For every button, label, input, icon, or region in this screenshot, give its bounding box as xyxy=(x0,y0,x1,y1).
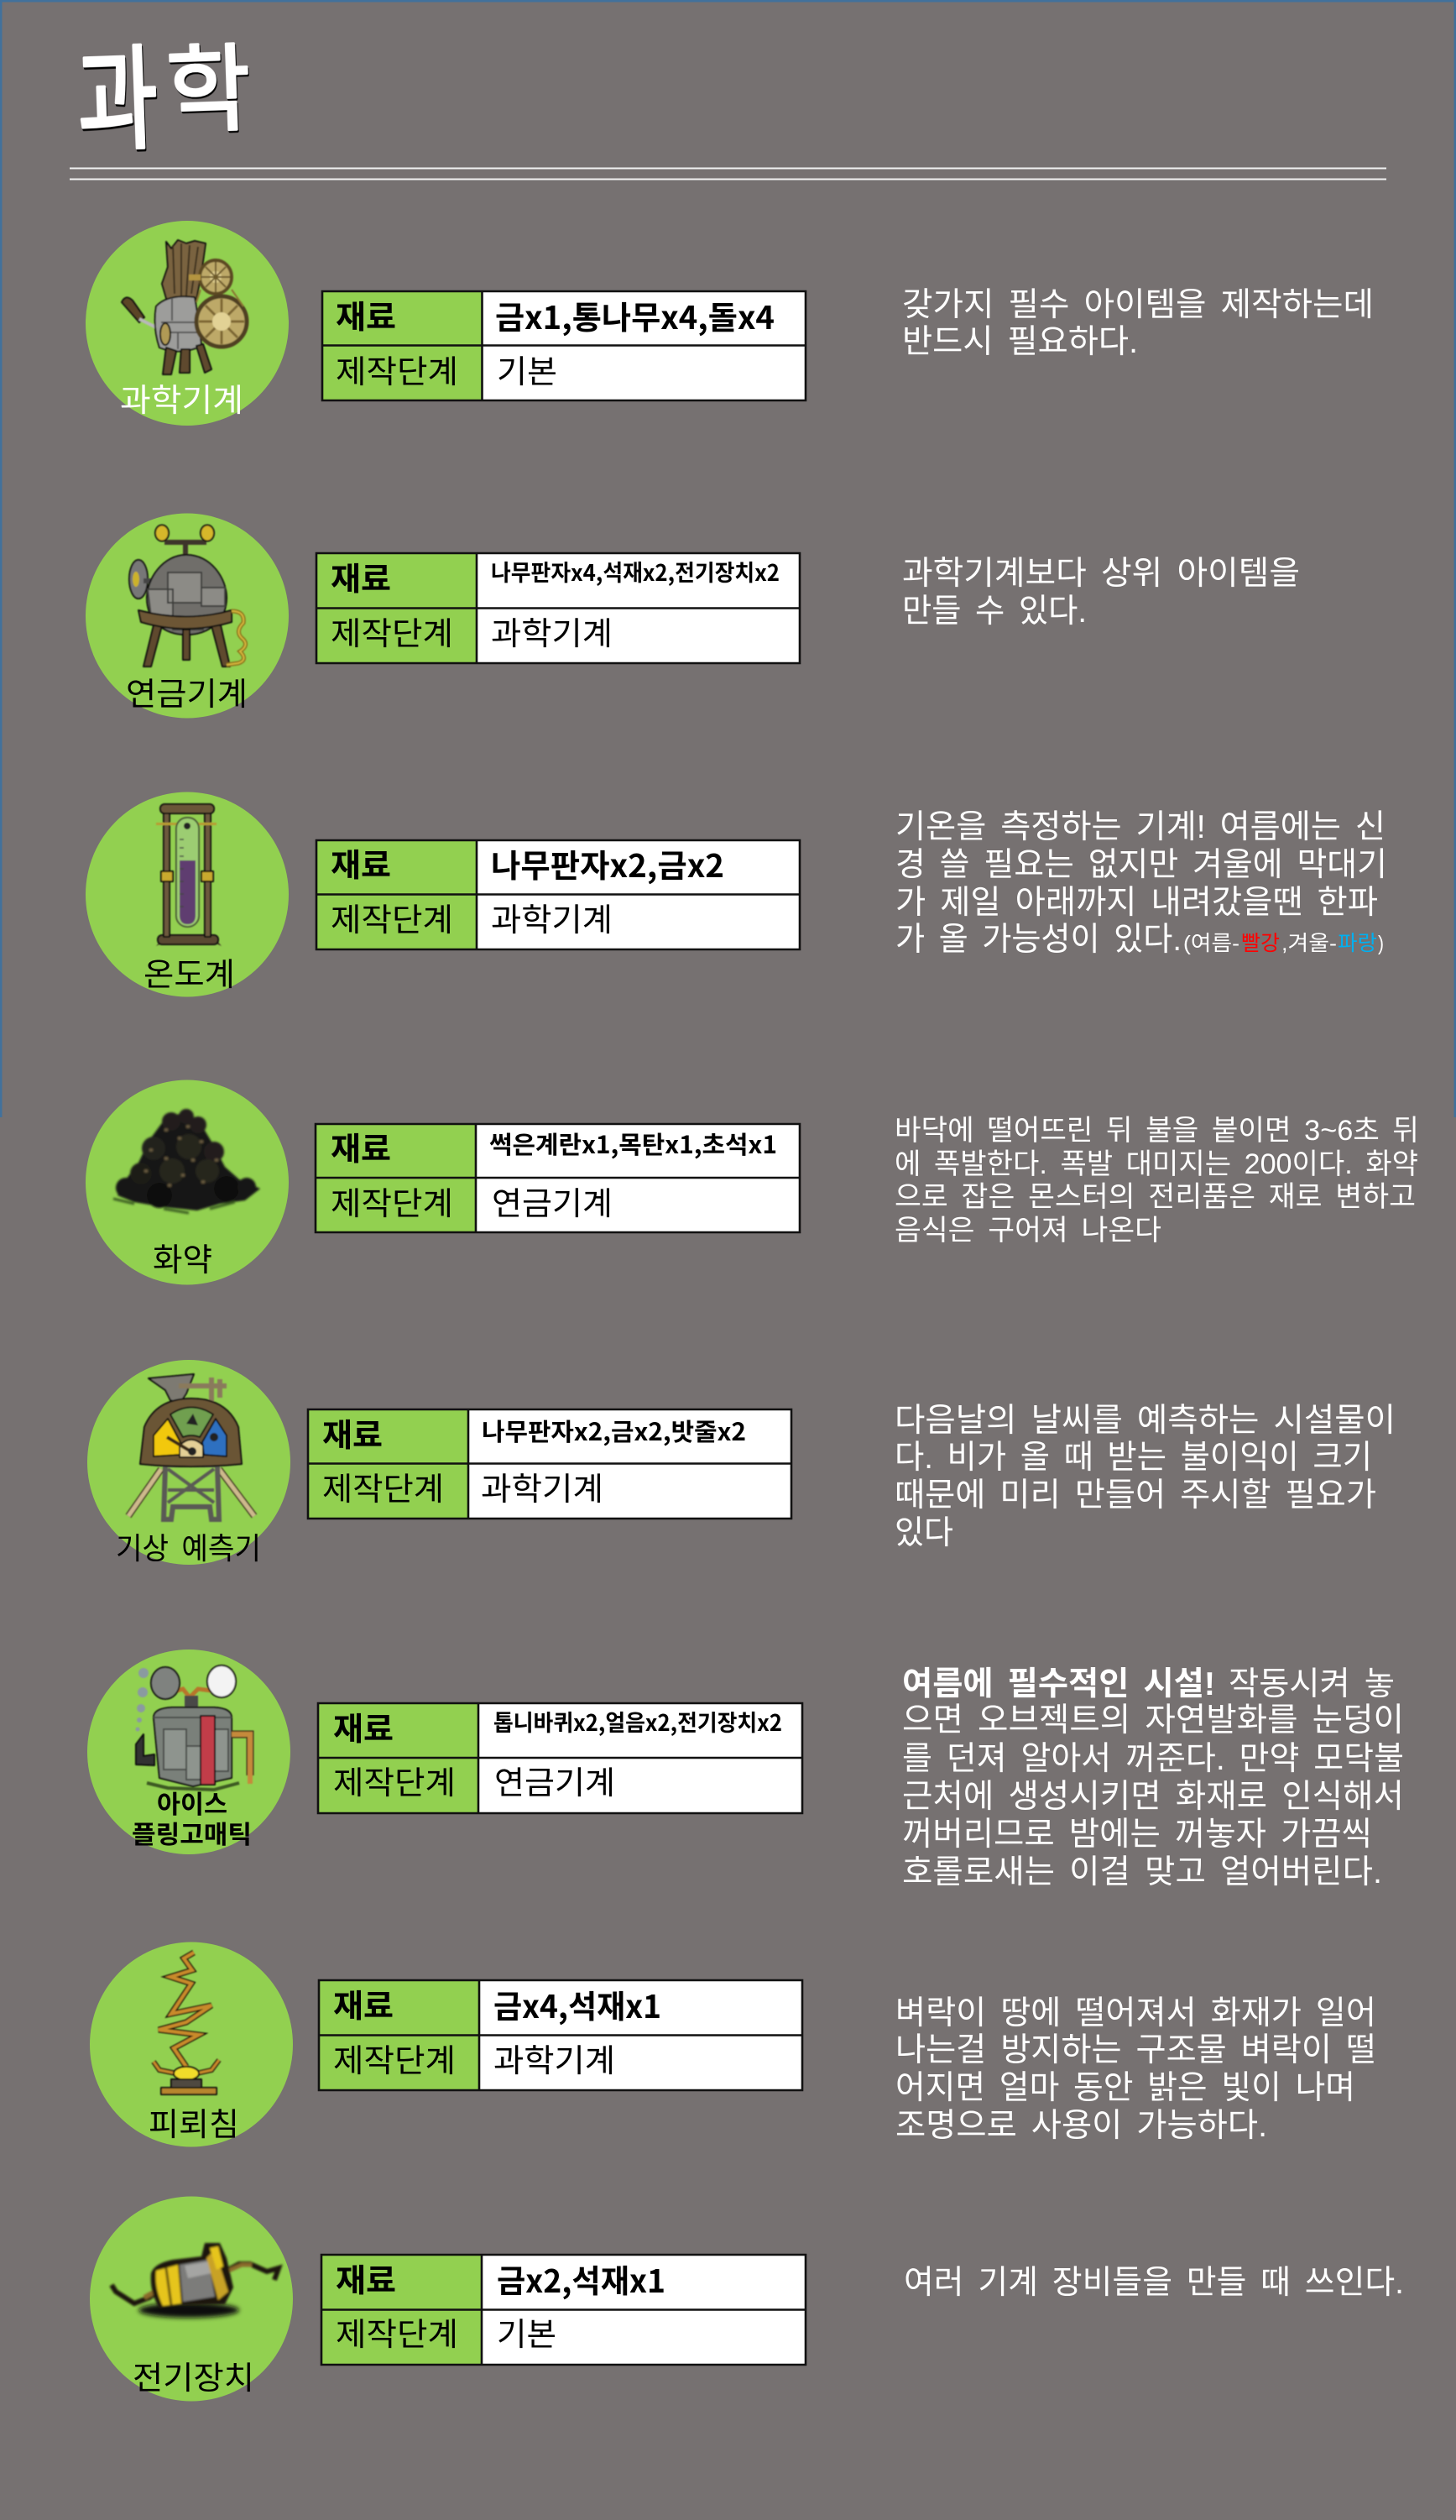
table: 전기장치 recipe: 재료 xyxy=(336,2255,396,2301)
item: 화약 xyxy=(86,1080,1419,1284)
table: 화약 recipe: 재료 xyxy=(331,1123,391,1169)
table: 화약 recipe xyxy=(315,1123,800,1232)
description: 화약: 으로 잡은 몬스터의 전리품은 재로 변하고 xyxy=(895,1181,1416,1213)
description: 과학기계 xyxy=(902,287,1374,360)
table: 전기장치 recipe: 기본 xyxy=(497,2308,556,2355)
description: 아이스 플링고매틱 xyxy=(902,1666,1404,1890)
table: 화약 recipe: 썩은계란x1,목탄x1,초석x1 xyxy=(489,1126,777,1161)
description: 아이스 플링고매틱: 를 던져 알아서 꺼준다. 만약 모닥불 xyxy=(902,1741,1404,1777)
title: 과 xyxy=(76,36,160,165)
description: 아이스 플링고매틱: 작동시켜 놓 xyxy=(1229,1666,1395,1702)
table: 온도계 recipe: 나무판자x2,금x2 xyxy=(491,840,724,886)
description: 온도계: 가 올 가능성이 있다. xyxy=(895,922,1182,958)
table: 아이스 플링고매틱 recipe xyxy=(317,1702,802,1813)
description: 전기장치: 여러 기계 장비들을 만들 때 쓰인다. xyxy=(904,2265,1404,2301)
table: 연금기계 recipe: 과학기계 xyxy=(491,608,613,654)
description: 아이스 플링고매틱: 으면 오브젝트의 자연발화를 눈덩이 xyxy=(902,1702,1404,1738)
icon: alchemy engine xyxy=(129,525,246,667)
description: 기상 예측기: 다음날의 날씨를 예측하는 시설물이 xyxy=(895,1403,1396,1439)
description: 과학기계: 갖가지 필수 아이템을 제작하는데 xyxy=(902,287,1374,323)
item: 기상 예측기 xyxy=(87,1360,1396,1566)
description: 피뢰침: 나는걸 방지하는 구조물 벼락이 떨 xyxy=(895,2032,1376,2068)
description: 온도계: 경 쓸 필요는 없지만 겨울에 막대기 xyxy=(895,847,1387,883)
item: 연금기계 xyxy=(86,514,1300,719)
description: 아이스 플링고매틱: 꺼버리므로 밤에는 꺼놓자 가끔씩 xyxy=(902,1817,1372,1853)
item: 아이스 플링고매틱 xyxy=(87,1650,1404,1890)
label: 화약: 화약 xyxy=(153,1243,212,1278)
table: 피뢰침 recipe: 과학기계 xyxy=(493,2035,615,2081)
table: 온도계 recipe xyxy=(316,839,800,949)
description: 화약: 바닥에 떨어뜨린 뒤 불을 붙이면 3~6초 뒤 xyxy=(895,1115,1419,1147)
table: 피뢰침 recipe: 제작단계 xyxy=(333,2035,456,2081)
label: 과학기계: 과학기계 xyxy=(120,384,243,419)
description: 온도계: 파랑 xyxy=(1338,932,1377,955)
label: 연금기계: 연금기계 xyxy=(126,677,248,713)
table: 아이스 플링고매틱 recipe: 톱니바퀴x2,얼음x2,전기장치x2 xyxy=(493,1705,782,1738)
table: 피뢰침 recipe xyxy=(318,1979,802,2090)
description: 아이스 플링고매틱: 호롤로새는 이걸 맞고 얼어버린다. xyxy=(902,1854,1382,1890)
table: 아이스 플링고매틱 recipe: 재료 xyxy=(333,1703,394,1749)
icon: science machine xyxy=(122,240,247,374)
table: 과학기계 recipe xyxy=(321,290,806,400)
icon: lightning rod xyxy=(154,1953,219,2094)
table: 화약 recipe: 제작단계 xyxy=(331,1178,453,1224)
badge: 연금기계 xyxy=(86,514,289,719)
description: 온도계: ) xyxy=(1378,932,1384,955)
icon: gunpowder pile xyxy=(113,1109,260,1213)
table: 피뢰침 recipe: 금x4,석재x1 xyxy=(493,1981,661,2027)
description: 온도계: 가 제일 아래까지 내려갔을땐 한파 xyxy=(895,885,1378,921)
icon: thermal measurer xyxy=(156,804,222,946)
table: 연금기계 recipe: 재료 xyxy=(331,553,391,599)
description: 온도계: (여름- xyxy=(1183,932,1239,955)
description: 과학기계: 반드시 필요하다. xyxy=(902,324,1138,360)
table: 전기장치 recipe: 금x2,석재x1 xyxy=(497,2256,665,2302)
item: 과학기계 xyxy=(86,221,1374,426)
description: 피뢰침: 어지면 얼마 동안 밝은 빛이 나며 xyxy=(895,2070,1355,2106)
item: 전기장치 xyxy=(90,2196,1404,2401)
table: 기상 예측기 recipe xyxy=(307,1409,791,1519)
table: 연금기계 recipe: 나무판자x4,석재x2,전기장치x2 xyxy=(491,555,780,588)
description: 연금기계: 만들 수 있다. xyxy=(902,593,1087,630)
table: 기상 예측기 recipe: 제작단계 xyxy=(322,1463,444,1509)
table: 피뢰침 recipe: 재료 xyxy=(333,1980,394,2026)
title: 학 xyxy=(164,36,253,144)
table: 과학기계 recipe: 기본 xyxy=(497,346,557,392)
description: 아이스 플링고매틱: 여름에 필수적인 시설! xyxy=(902,1666,1215,1702)
description: 화약: 에 폭발한다. 폭발 대미지는 200이다. 화약 xyxy=(895,1148,1418,1180)
table: 온도계 recipe: 과학기계 xyxy=(491,894,613,940)
description: 피뢰침: 조명으로 사용이 가능하다. xyxy=(895,2108,1267,2144)
badge: 전기장치 xyxy=(90,2196,293,2401)
label: 아이스 플링고매틱: 아이스 xyxy=(157,1791,227,1819)
badge: 기상 예측기 xyxy=(87,1360,290,1565)
badge: 화약 xyxy=(86,1080,289,1284)
table: 전기장치 recipe xyxy=(321,2254,806,2365)
item: 피뢰침 xyxy=(90,1942,1376,2147)
table: 연금기계 recipe: 제작단계 xyxy=(331,608,453,654)
table: 화약 recipe: 연금기계 xyxy=(492,1178,613,1224)
icon: electrical doodad xyxy=(112,2243,279,2318)
table: 기상 예측기 recipe: 재료 xyxy=(322,1409,383,1456)
badge: 과학기계 xyxy=(86,221,289,426)
description: 화약 xyxy=(895,1115,1419,1247)
title xyxy=(76,36,253,165)
table: 온도계 recipe: 재료 xyxy=(331,839,391,886)
table: 과학기계 recipe: 제작단계 xyxy=(336,346,458,392)
table: 아이스 플링고매틱 recipe: 제작단계 xyxy=(333,1757,456,1803)
table: 연금기계 recipe xyxy=(316,552,800,663)
description: 연금기계: 과학기계보다 상위 아이템을 xyxy=(902,556,1300,592)
icon: rainometer xyxy=(128,1374,254,1519)
label: 기상 예측기: 기상 예측기 xyxy=(116,1531,261,1566)
description: 온도계: 빨강 xyxy=(1241,932,1280,955)
description: 기상 예측기: 다. 비가 올 때 받는 불이익이 크기 xyxy=(895,1440,1372,1476)
item: 온도계 xyxy=(86,792,1387,997)
badge: 온도계 xyxy=(86,792,289,997)
description: 피뢰침 xyxy=(895,1995,1376,2144)
description: 화약: 음식은 구어져 나온다 xyxy=(895,1215,1161,1247)
table: 기상 예측기 recipe: 과학기계 xyxy=(481,1463,603,1509)
label: 아이스 플링고매틱: 플링고매틱 xyxy=(132,1822,252,1849)
description: 기상 예측기: 때문에 미리 만들어 주시할 필요가 xyxy=(895,1477,1376,1514)
description: 온도계 xyxy=(895,809,1387,958)
label: 전기장치: 전기장치 xyxy=(133,2361,254,2397)
badge: 아이스 플링고매틱 xyxy=(87,1650,290,1854)
badge: 피뢰침 xyxy=(90,1942,293,2147)
table: 기상 예측기 recipe: 나무판자x2,금x2,밧줄x2 xyxy=(482,1413,746,1448)
table: 과학기계 recipe: 재료 xyxy=(336,291,396,337)
description: 기상 예측기: 있다 xyxy=(895,1515,953,1551)
icon: ice flingomatic xyxy=(136,1665,250,1790)
table: 온도계 recipe: 제작단계 xyxy=(331,894,453,940)
label: 피뢰침: 피뢰침 xyxy=(149,2108,239,2143)
description: 연금기계 xyxy=(902,556,1300,630)
description: 아이스 플링고매틱: 근처에 생성시키면 화재로 인식해서 xyxy=(902,1779,1404,1815)
label: 온도계: 온도계 xyxy=(144,958,235,993)
table: 아이스 플링고매틱 recipe: 연금기계 xyxy=(494,1757,615,1803)
table: 과학기계 recipe: 금x1,통나무x4,돌x4 xyxy=(495,292,775,338)
label: 아이스 플링고매틱 xyxy=(132,1791,252,1849)
table: 전기장치 recipe: 제작단계 xyxy=(336,2308,458,2355)
description: 온도계: 기온을 측정하는 기계! 여름에는 신 xyxy=(895,809,1386,845)
description: 기상 예측기 xyxy=(895,1403,1396,1551)
description: 온도계: ,겨울- xyxy=(1281,932,1337,955)
description: 피뢰침: 벼락이 땅에 떨어져서 화재가 일어 xyxy=(895,1995,1376,2031)
